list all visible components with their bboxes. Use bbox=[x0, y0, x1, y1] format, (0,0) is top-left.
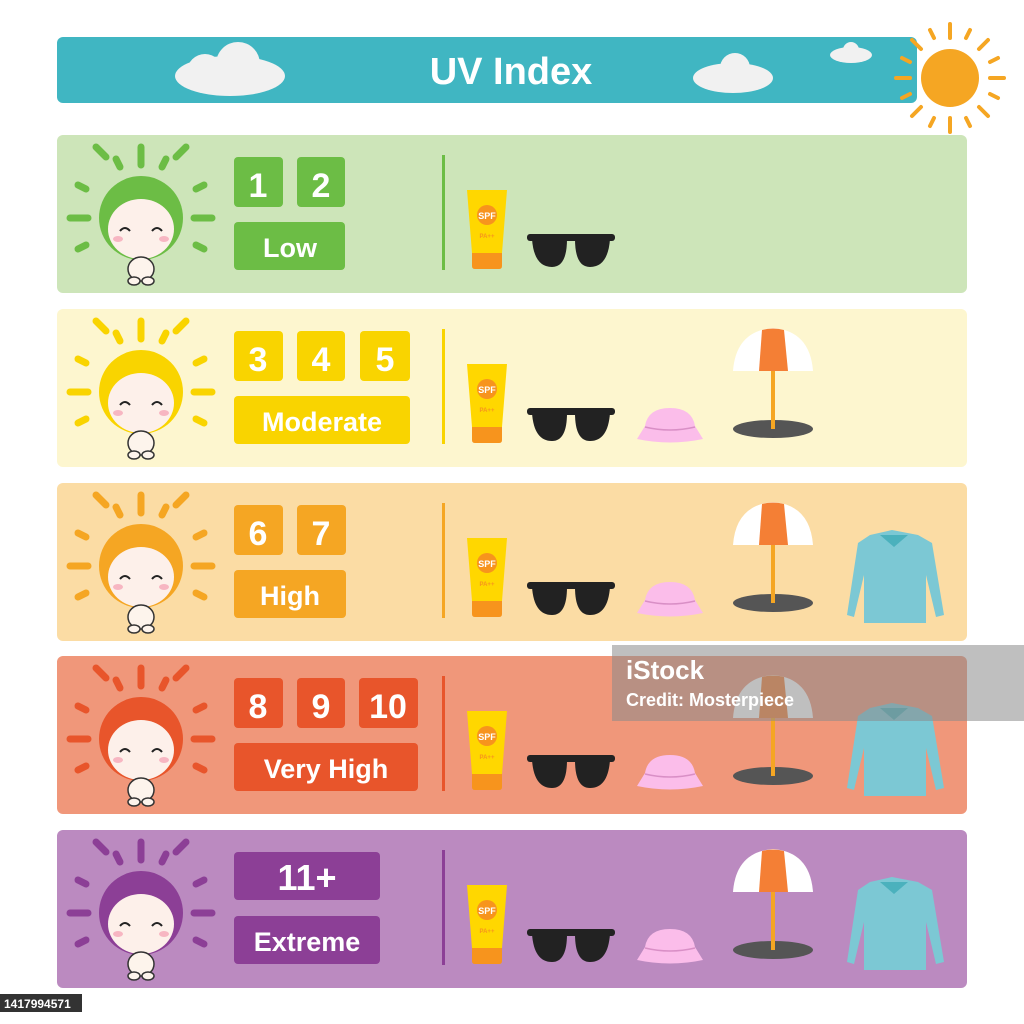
number boxes 8 9 10: 9 bbox=[312, 688, 330, 726]
title: UV Index bbox=[430, 51, 592, 93]
icons: sunscreen, sunglasses bbox=[467, 190, 615, 269]
icons: all five bbox=[467, 675, 944, 796]
panel: extreme bbox=[57, 830, 967, 988]
number boxes 6 7: 6 bbox=[249, 515, 267, 553]
panel: moderate bbox=[57, 309, 967, 467]
number boxes 8 9 10 bbox=[234, 678, 418, 728]
number boxes 8 9 10: 10 bbox=[369, 688, 407, 726]
icons: sunscreen, sunglasses, hat, umbrella bbox=[467, 328, 813, 443]
number boxes 6 7 bbox=[234, 505, 346, 555]
stock id bbox=[0, 994, 82, 1012]
panel: very high bbox=[57, 656, 967, 814]
label: High: High bbox=[260, 581, 320, 611]
icons: all five bbox=[467, 849, 944, 970]
small cloud bbox=[830, 42, 872, 63]
icon: sun bbox=[896, 24, 1004, 132]
number boxes 6 7: 7 bbox=[312, 515, 330, 553]
label: Extreme bbox=[234, 916, 380, 964]
watermark bbox=[612, 645, 1024, 721]
number boxes 3 4 5: 5 bbox=[376, 341, 394, 379]
header banner bbox=[57, 37, 917, 103]
panel: low bbox=[57, 135, 967, 293]
label: High bbox=[234, 570, 346, 618]
icons: all five bbox=[467, 502, 944, 623]
number box 11+: 11+ bbox=[277, 857, 337, 898]
label: Very High: Very High bbox=[264, 754, 388, 784]
label: Low: Low bbox=[263, 233, 318, 263]
label: Extreme: Extreme bbox=[254, 927, 360, 957]
number boxes 3 4 5: 3 bbox=[249, 341, 267, 379]
label: Moderate: Moderate bbox=[262, 407, 382, 437]
number boxes 3 4 5: 4 bbox=[312, 341, 331, 379]
cloud right bbox=[693, 53, 773, 93]
character: purple sun bbox=[70, 842, 212, 980]
character: red sun bbox=[70, 668, 212, 806]
stock id: 1417994571 bbox=[4, 997, 71, 1011]
number boxes 8 9 10: 8 bbox=[249, 688, 267, 726]
panel: high bbox=[57, 483, 967, 641]
number boxes 1 2: 1 bbox=[249, 167, 267, 205]
label: Moderate bbox=[234, 396, 410, 444]
label: Low bbox=[234, 222, 345, 270]
watermark: Credit: Mosterpiece bbox=[626, 690, 794, 710]
character: green sun bbox=[70, 147, 212, 285]
number boxes 1 2 bbox=[234, 157, 345, 207]
number boxes 1 2: 2 bbox=[312, 167, 330, 205]
number box 11+ bbox=[234, 852, 380, 900]
character: yellow sun bbox=[70, 321, 212, 459]
label: Very High bbox=[234, 743, 418, 791]
watermark: iStock bbox=[626, 655, 705, 685]
number boxes 3 4 5 bbox=[234, 331, 410, 381]
cloud left bbox=[175, 42, 285, 96]
character: orange sun bbox=[70, 495, 212, 633]
